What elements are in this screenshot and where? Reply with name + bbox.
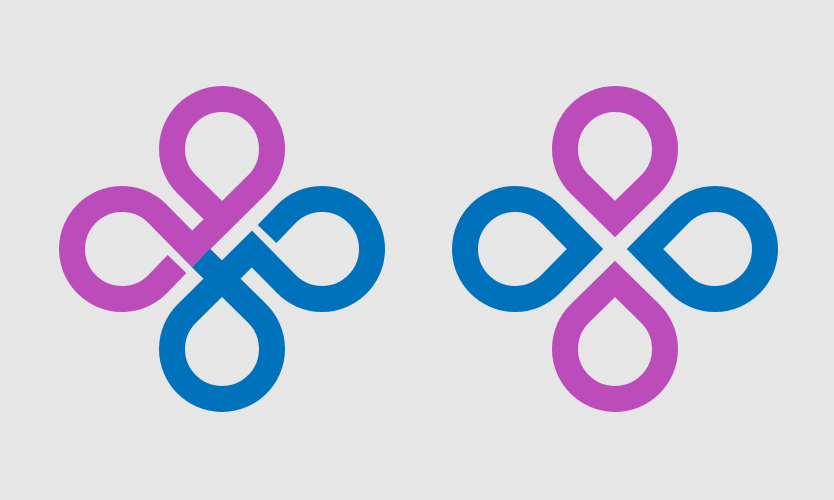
magenta strand: top and left loops: [72, 99, 272, 299]
blue strand: bottom and right loops: [172, 199, 372, 399]
magenta loop: left: [72, 199, 201, 299]
teardrop: top magenta: [565, 99, 665, 219]
teardrop: left blue: [465, 199, 585, 299]
teardrop: right blue: [645, 199, 765, 299]
magenta loop: top: [172, 99, 272, 249]
panel: four separate teardrops (right): [465, 99, 765, 399]
blue loop: bottom: [172, 240, 272, 399]
panel: interlaced knot (left): [72, 99, 372, 399]
teardrop: bottom magenta: [565, 279, 665, 399]
blue loop: right: [243, 199, 372, 299]
